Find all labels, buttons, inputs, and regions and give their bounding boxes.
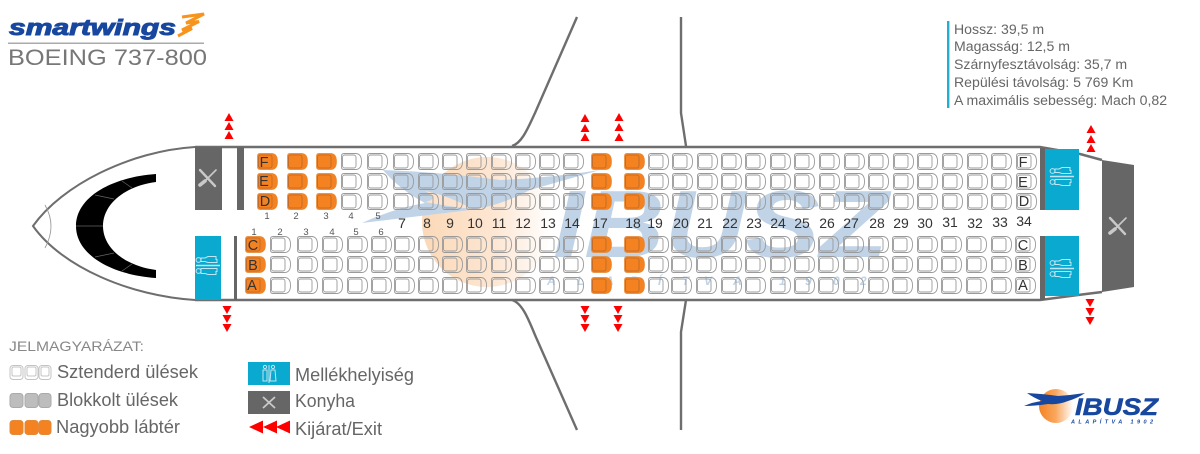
seat letters: rear: F bbox=[1019, 155, 1028, 171]
small row numbers: 1 bbox=[251, 227, 257, 238]
legend: lavatory: Mellékhelyiség bbox=[295, 365, 414, 385]
small row numbers: 1 bbox=[264, 211, 270, 222]
exit arrows: rear bottom bbox=[1086, 299, 1094, 325]
row numbers: 33 bbox=[992, 214, 1008, 230]
specification block: A maximális sebesség: Mach 0,82 bbox=[954, 92, 1167, 108]
row numbers: 12 bbox=[515, 215, 531, 231]
legend: lavatory bbox=[248, 362, 414, 385]
small row numbers: 2 bbox=[277, 227, 283, 238]
row numbers: 22 bbox=[722, 215, 738, 231]
legend: blocked seats: Blokkolt ülések bbox=[57, 390, 179, 410]
legend: extra legroom seats: Nagyobb lábtér bbox=[56, 417, 180, 437]
row numbers: 25 bbox=[794, 215, 810, 231]
row numbers: 24 bbox=[770, 215, 786, 231]
front divider top bbox=[237, 147, 244, 210]
small row numbers: 5 bbox=[375, 211, 381, 222]
small row numbers: 6 bbox=[378, 227, 384, 238]
small row numbers: 4 bbox=[329, 227, 335, 238]
specification block bbox=[947, 21, 1167, 108]
smartwings logo bbox=[9, 14, 204, 40]
small row numbers: 3 bbox=[323, 211, 329, 222]
legend bbox=[9, 338, 414, 439]
small row numbers: 5 bbox=[353, 227, 359, 238]
row numbers: 13 bbox=[540, 215, 556, 231]
row numbers: 29 bbox=[893, 215, 909, 231]
wing: lower right edge bbox=[681, 300, 686, 430]
row numbers: 7 bbox=[398, 215, 406, 231]
seats: upper block bbox=[258, 154, 1036, 210]
smartwings logo: smartwings bbox=[9, 15, 176, 40]
seats: lower block bbox=[246, 236, 1036, 294]
row numbers: 18 bbox=[625, 215, 641, 231]
small row numbers bbox=[251, 211, 384, 238]
row numbers: 27 bbox=[843, 215, 859, 231]
specification block: Repülési távolság: 5 769 Km bbox=[954, 74, 1133, 90]
legend title: JELMAGYARÁZAT: bbox=[9, 338, 144, 354]
exit arrows: over wing top 2 bbox=[614, 113, 624, 141]
logo divider bbox=[8, 42, 204, 44]
exit arrows: front bottom bbox=[222, 306, 232, 332]
front lavatory bbox=[195, 236, 221, 300]
row numbers: 34 bbox=[1016, 213, 1032, 229]
legend: exit: Kijárat/Exit bbox=[295, 419, 382, 439]
seat letters: rear: E bbox=[1018, 175, 1028, 191]
exit arrows: over wing bottom 2 bbox=[614, 306, 622, 332]
row numbers: 11 bbox=[492, 215, 506, 231]
rear lavatory top bbox=[1040, 148, 1079, 210]
row numbers: 14 bbox=[564, 215, 580, 231]
seat letters: front: D bbox=[260, 194, 270, 210]
seat letters: front: C bbox=[248, 238, 258, 254]
watermark: IBUSZ logo bbox=[362, 157, 892, 288]
wing: upper right edge bbox=[681, 17, 686, 146]
seat letters: rear bbox=[1018, 155, 1029, 294]
seat letters: front: E bbox=[259, 174, 269, 190]
seat letters: rear: D bbox=[1019, 194, 1029, 210]
watermark: IBUSZ logo: IBUSZ bbox=[553, 171, 892, 278]
exit arrows: rear top bbox=[1086, 125, 1096, 152]
rear lavatory bottom bbox=[1040, 236, 1079, 300]
specification block: Szárnyfesztávolság: 35,7 m bbox=[954, 56, 1127, 72]
row numbers: 19 bbox=[647, 215, 663, 231]
seat letters: front: B bbox=[248, 258, 258, 274]
seat letters: front bbox=[247, 155, 270, 294]
watermark: IBUSZ logo: ALAPÍTVA1902 bbox=[546, 273, 867, 288]
seat letters: rear: C bbox=[1018, 238, 1028, 254]
row numbers: 20 bbox=[673, 215, 689, 231]
exit arrows: over wing bottom 1 bbox=[580, 306, 590, 332]
row numbers: 9 bbox=[446, 215, 454, 231]
exit arrows: front top bbox=[224, 113, 234, 139]
legend: standard seats: Sztenderd ülések bbox=[57, 362, 199, 382]
small row numbers: 3 bbox=[303, 227, 309, 238]
row numbers: 8 bbox=[423, 215, 431, 231]
row numbers: 31 bbox=[942, 214, 958, 230]
row numbers: 32 bbox=[967, 215, 983, 231]
row numbers: 17 bbox=[592, 215, 608, 231]
specification block: Magasság: 12,5 m bbox=[954, 38, 1070, 54]
rear galley bbox=[1102, 160, 1134, 292]
row numbers: 21 bbox=[697, 215, 713, 231]
cockpit windshield bbox=[76, 174, 156, 278]
legend: exit bbox=[249, 419, 382, 439]
seat letters: rear: B bbox=[1018, 258, 1028, 274]
row numbers bbox=[398, 213, 1032, 231]
IBUSZ logo bbox=[1024, 389, 1160, 426]
wing: lower left edge bbox=[512, 300, 577, 430]
seat letters: rear: A bbox=[1018, 278, 1028, 294]
front galley bbox=[195, 147, 222, 210]
legend: galley: Konyha bbox=[295, 391, 356, 411]
seat letters: front: A bbox=[247, 278, 257, 294]
small row numbers: 2 bbox=[293, 211, 299, 222]
small row numbers: 4 bbox=[348, 211, 354, 222]
aircraft fuselage outline bbox=[33, 147, 1102, 300]
aircraft type heading: BOEING 737-800 bbox=[8, 45, 207, 70]
legend: galley bbox=[248, 391, 356, 414]
exit arrows: over wing top 1 bbox=[580, 114, 590, 141]
seat letters: front: F bbox=[260, 155, 269, 171]
IBUSZ logo: ALAPÍTVA 1902 bbox=[1070, 418, 1153, 426]
specification block: Hossz: 39,5 m bbox=[954, 21, 1044, 37]
IBUSZ logo: IBUSZ bbox=[1075, 394, 1160, 421]
row numbers: 28 bbox=[869, 215, 885, 231]
row numbers: 30 bbox=[917, 215, 933, 231]
front divider bottom bbox=[234, 236, 237, 300]
wing: upper left edge bbox=[512, 17, 577, 146]
row numbers: 23 bbox=[746, 215, 762, 231]
row numbers: 10 bbox=[467, 215, 483, 231]
row numbers: 26 bbox=[819, 215, 835, 231]
